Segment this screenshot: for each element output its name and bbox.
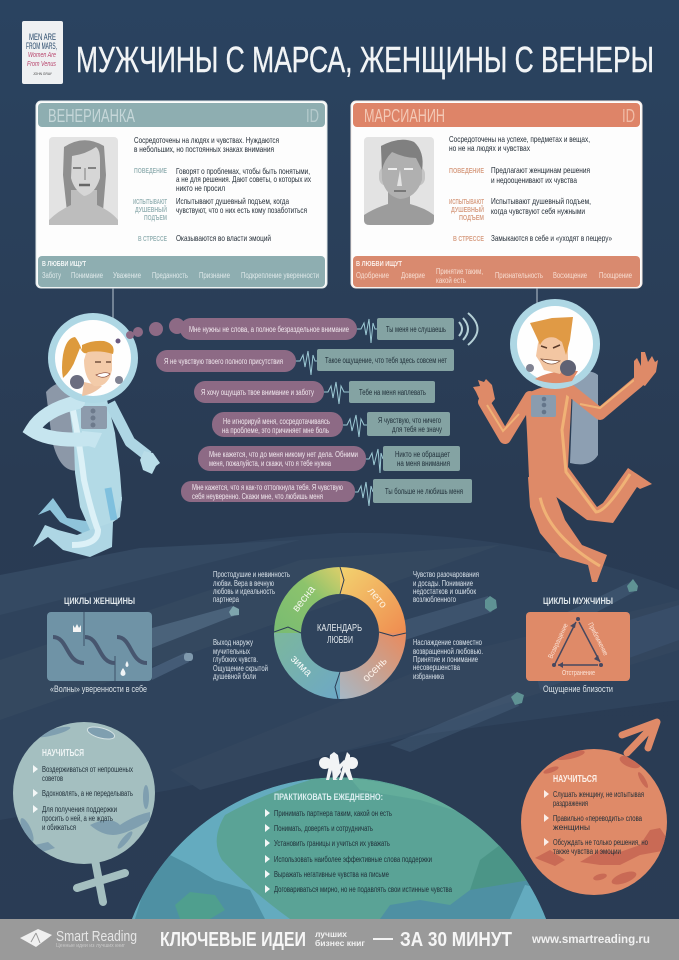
stress: Оказываются во власти эмоций [176, 233, 271, 243]
uplift: ИСПЫТЫВАЮТ [449, 199, 484, 206]
calendar text right [413, 569, 483, 681]
calendar text left: Простодушие и невинность [213, 569, 290, 579]
card footer: Заботу [42, 271, 61, 280]
helmet [48, 313, 138, 403]
card footer: Одобрение [356, 271, 389, 280]
pair 2 [156, 349, 454, 375]
card summary: Сосредоточены на людях и чувствах. Нуждаются [134, 135, 279, 145]
panel: women cycles: «Волны» уверенности в себе [50, 684, 147, 695]
learn list: раздражения [553, 799, 588, 808]
connector lines [113, 288, 537, 335]
helmet fittings [70, 375, 84, 389]
earth list: Использовать наиболее эффективные слова поддержки [274, 855, 432, 864]
pair 5: на меня внимания [397, 459, 450, 468]
ring chart: love calendar: лето [365, 585, 389, 611]
book cover: Women Are [28, 52, 56, 59]
chest pack [531, 395, 556, 417]
woman astronaut [32, 313, 160, 557]
icon: couple of astronauts [319, 752, 358, 780]
card footer [38, 256, 325, 287]
pair 5: Мне кажется, что до меня никому нет дела. Обними [209, 450, 358, 459]
pair 1: Ты меня не слушаешь [386, 325, 446, 334]
panel: men cycles: Возвращение [547, 622, 570, 660]
behaviour: ПОВЕДЕНИЕ [134, 168, 167, 175]
pair 3: Я хочу ощущать твое внимание и заботу [201, 388, 314, 397]
portrait: woman [49, 137, 118, 225]
pair 6: себя неуверенно. Скажи мне, что любишь меня [192, 492, 323, 501]
torso [525, 385, 572, 500]
ring chart: love calendar: осень [360, 655, 390, 685]
pair 2: Такое ощущение, что тебя здесь совсем нет [325, 356, 447, 365]
panel: men cycles: Отстранение [562, 670, 595, 677]
icon: sound waves [459, 313, 478, 345]
card footer: какой есть [436, 276, 466, 285]
pair 6: Ты больше не любишь меня [385, 487, 463, 496]
stress: Замыкаются в себе и «уходят в пещеру» [491, 233, 612, 243]
card footer: В ЛЮБВИ ИЩУТ [42, 261, 87, 268]
calendar text left: партнера [213, 594, 239, 604]
earth list: Понимать, доверять и сотрудничать [274, 824, 373, 833]
panel: mars ID card [351, 101, 642, 288]
learn list [33, 765, 133, 832]
stress: В СТРЕССЕ [138, 236, 167, 243]
uplift: Испытывают душевный подъем, когда [176, 196, 289, 206]
dialogue: bubble pairs [156, 313, 478, 506]
slogan: КЛЮЧЕВЫЕ ИДЕИ [160, 929, 306, 951]
card header [353, 103, 640, 127]
slogan: ЗА 30 МИНУТ [400, 929, 512, 951]
panel: mars planet: НАУЧИТЬСЯ [553, 774, 597, 785]
backpack [46, 381, 80, 471]
learn list: Правильно «переводить» слова [553, 814, 642, 823]
slogan [160, 929, 512, 951]
card footer: Признание [199, 271, 230, 280]
pair 4: Я чувствую, что ничего [378, 416, 441, 425]
earth list: Установить границы и учиться их уважать [274, 839, 390, 848]
uplift: Испытывают душевный подъем, [491, 196, 591, 206]
earth list: ПРАКТИКОВАТЬ ЕЖЕДНЕВНО: [274, 792, 383, 802]
card summary [449, 134, 590, 153]
earth list: Принимать партнера таким, какой он есть [274, 809, 392, 818]
panel: men cycles [526, 596, 630, 695]
uplift: ПОДЪЕМ [459, 215, 484, 222]
pair 5 [198, 446, 460, 473]
front arm [32, 402, 90, 440]
panel: men cycles: Приближение [586, 621, 610, 657]
panel: women cycles [47, 596, 152, 695]
logo [20, 929, 137, 949]
ring chart: love calendar: весна [290, 583, 318, 614]
helmet [510, 299, 600, 389]
calendar text right: недостатков и ошибок [413, 586, 476, 596]
helmet fittings [560, 360, 576, 376]
panel: venus planet: НАУЧИТЬСЯ [42, 748, 84, 759]
behaviour: ПОВЕДЕНИЕ [449, 168, 484, 175]
learn list: также чувства и эмоции [553, 847, 621, 856]
card footer: Восхищение [553, 271, 587, 280]
learn list: женщины [553, 823, 590, 832]
card footer: Принятие таким, [436, 267, 483, 276]
slogan: бизнес книг [315, 939, 366, 948]
chest pack [81, 406, 107, 429]
website: www.smartreading.ru [531, 932, 650, 946]
calendar text right: Чувство разочарования [413, 569, 479, 579]
card header: ID [306, 106, 319, 126]
calendar text left: глубоких чувств. [213, 654, 258, 664]
card footer: Преданность [152, 271, 188, 280]
card summary [134, 135, 279, 154]
calendar text left: любовь и идеальность [213, 586, 275, 596]
behaviour: никто не просил [176, 183, 225, 193]
book cover: JOHN GRAY [33, 71, 52, 76]
pair 3: Тебе на меня наплевать [359, 388, 426, 397]
card summary: Сосредоточены на успехе, предметах и вещах, [449, 134, 590, 144]
craters [535, 748, 668, 887]
behaviour: Говорят о проблемах, чтобы быть понятыми, [176, 166, 310, 176]
calendar text left: мучительных [213, 646, 251, 656]
panel: venus planet [13, 722, 155, 902]
learn list: Слушать женщину, не испытывая [553, 790, 644, 799]
card header: МАРСИАНИН [364, 106, 445, 126]
behaviour: а не для решения. Дают советы, о которых их [176, 174, 312, 184]
earth list: Выражать негативные чувства на письме [274, 870, 389, 879]
book cover: MEN ARE [29, 32, 56, 42]
pair 5: меня, пожалуйста, и скажи, что я тебе нужна [209, 459, 331, 468]
calendar text right: и досады. Понимание [413, 578, 473, 588]
card summary: в небольших, но постоянных знаках внимания [134, 144, 274, 154]
panel: venus ID card [36, 101, 327, 288]
card header: ВЕНЕРИАНКА [48, 106, 135, 126]
torso [65, 396, 122, 530]
panel: earth [130, 777, 550, 919]
panel: mars planet [521, 722, 668, 895]
thought bubbles [126, 318, 185, 339]
logo: Smart Reading [56, 929, 137, 945]
comets [152, 579, 638, 752]
calendar text left [213, 569, 290, 681]
calendar text right: возвращенной любовью. [413, 646, 483, 656]
panel: women cycles: ЦИКЛЫ ЖЕНЩИНЫ [64, 596, 135, 607]
learn list: и обижаться [42, 823, 76, 832]
ring chart: love calendar [274, 567, 406, 699]
book cover: FROM MARS, [26, 41, 57, 51]
behaviour [449, 165, 590, 185]
calendar text right: Принятие и понимание [413, 654, 478, 664]
card footer: Понимание [71, 271, 103, 280]
portrait: man [364, 137, 434, 225]
learn list: советов [42, 774, 63, 783]
backpack [570, 372, 598, 464]
behaviour: Предлагают женщинам решения [491, 165, 590, 175]
card footer: В ЛЮБВИ ИЩУТ [356, 261, 403, 268]
panel: men cycles: Ощущение близости [543, 684, 613, 695]
space bands [0, 533, 679, 820]
icon: crown [73, 624, 81, 632]
uplift: ИСПЫТЫВАЮТ [133, 199, 167, 206]
logo: Ценные идеи из лучших книг [56, 943, 125, 949]
card footer: Признательность [495, 271, 543, 280]
learn list: просить о ней, а не ждать [42, 814, 113, 823]
card summary: но не на людях и чувствах [449, 143, 531, 153]
legs [528, 477, 607, 582]
book cover: From Venus [27, 61, 56, 68]
footer bar [0, 919, 679, 960]
learn list: Обсуждать не только решения, но [553, 838, 648, 847]
slogan: лучших [315, 930, 348, 939]
pair 4: Не игнорируй меня, сосредотачиваясь [223, 417, 330, 426]
icon: drops [120, 661, 128, 676]
ring chart: love calendar: КАЛЕНДАРЬ [317, 623, 362, 634]
face [530, 317, 578, 383]
learn list: Воздерживаться от непрошеных [42, 765, 133, 774]
learn list: Для получения поддержки [42, 805, 117, 814]
uplift: когда чувствуют себя нужными [491, 206, 585, 216]
face [62, 337, 114, 396]
pair 5: Никто не обращает [395, 450, 450, 459]
calendar text left: Ощущение скрытой [213, 663, 268, 673]
pair 4: на проблеме, это причиняет мне боль [222, 426, 329, 435]
pair 4 [212, 412, 450, 437]
pair 2: Я не чувствую твоего полного присутствия [164, 357, 283, 366]
stress: В СТРЕССЕ [453, 236, 484, 243]
uplift: чувствуют, что о них есть кому позаботиться [176, 205, 307, 215]
stress [453, 233, 612, 243]
pair 6 [181, 479, 472, 506]
legs [38, 498, 92, 538]
behaviour: и недооценивают их чувства [491, 175, 577, 185]
craters [18, 725, 150, 852]
uplift: ПОДЪЕМ [144, 215, 167, 222]
uplift [449, 196, 591, 222]
stress [138, 233, 271, 243]
calendar text left: любви. Вера в вечную [213, 578, 274, 588]
back arm [110, 403, 148, 456]
calendar text right: Наслаждение совместно [413, 637, 482, 647]
card header: ID [622, 106, 635, 126]
behaviour [134, 166, 312, 193]
ring chart: love calendar: ЛЮБВИ [327, 635, 353, 646]
calendar text right: избранника [413, 671, 444, 681]
calendar text left: душевной боли [213, 671, 256, 681]
arms [484, 397, 530, 438]
earth list: Договариваться мирно, но не подавлять свои истинные чувства [274, 885, 452, 894]
ring chart: love calendar: зима [288, 653, 315, 680]
learn list [544, 790, 648, 856]
card footer [353, 256, 640, 287]
pair 1: Мне нужны не слова, а полное безраздельное внимание [189, 325, 349, 334]
calendar text left: Выход наружу [213, 637, 254, 647]
pair 4: для тебя не значу [392, 425, 442, 434]
card footer: Доверие [401, 271, 425, 280]
learn list: Вдохновлять, а не переделывать [42, 789, 133, 798]
card footer: Подкрепление уверенности [241, 271, 319, 280]
card footer: Поощрение [599, 271, 632, 280]
uplift: ДУШЕВНЫЙ [451, 205, 484, 214]
uplift [133, 196, 307, 222]
calendar text right: несовершенства [413, 662, 460, 672]
pair 6: Мне кажется, что я как-то оттолкнула тебя. Я чувствую [192, 483, 343, 492]
panel: men cycles: ЦИКЛЫ МУЖЧИНЫ [543, 596, 613, 607]
card footer: Уважение [113, 271, 141, 280]
pair 3 [194, 381, 435, 404]
uplift: ДУШЕВНЫЙ [135, 205, 167, 214]
man astronaut [473, 299, 658, 582]
calendar text right: возлюбленного [413, 594, 456, 604]
hands [473, 379, 495, 405]
pair 1 [180, 318, 454, 343]
earth list [265, 792, 452, 894]
card header [38, 103, 325, 127]
book cover [22, 21, 63, 84]
